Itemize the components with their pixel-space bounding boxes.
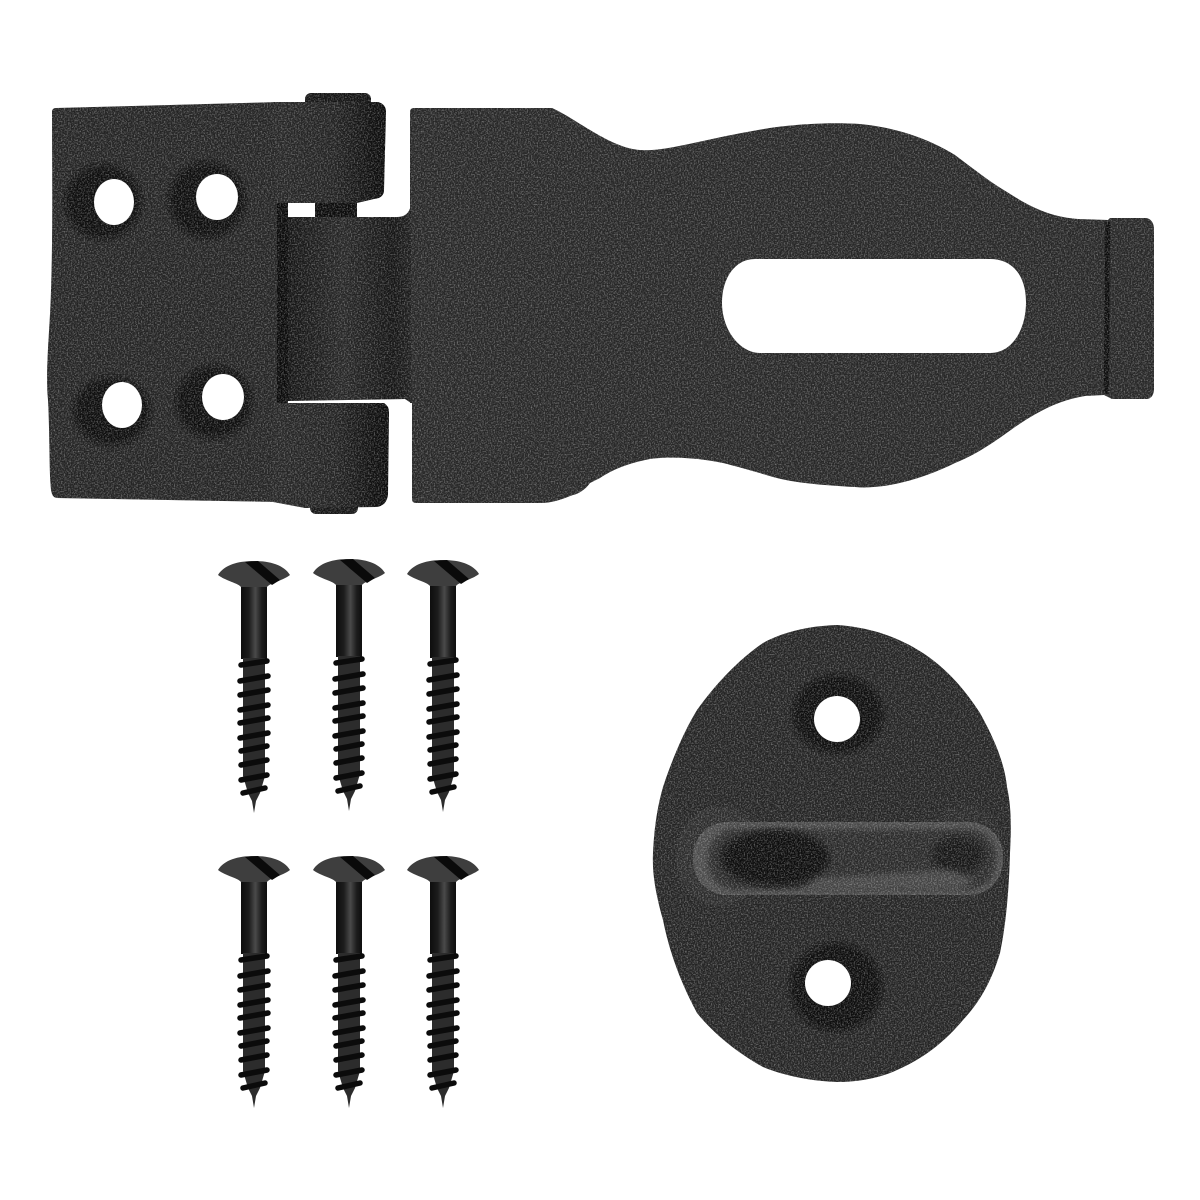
staple loop right shadow <box>932 837 984 873</box>
countersink: bottom left <box>74 377 150 445</box>
staple loop left shadow <box>721 830 829 886</box>
hinge gap opening <box>288 203 315 217</box>
staple loop lower highlight <box>800 870 975 892</box>
lower hinge knuckle <box>273 403 389 514</box>
hinge pin gap <box>315 203 357 219</box>
screws: bottom row <box>218 856 479 1108</box>
hasp assembly <box>47 93 1154 1082</box>
staple loop body <box>708 829 996 890</box>
bottom countersink <box>790 943 882 1031</box>
staple loop rim <box>693 822 1003 895</box>
staple left foot ring <box>676 806 764 906</box>
countersink: top right <box>169 162 245 238</box>
countersink: bottom right <box>176 366 252 438</box>
hinge leaf plate <box>47 102 280 502</box>
screws: top row <box>218 559 479 813</box>
central hinge barrel <box>288 203 411 403</box>
strap bent tip crease <box>1106 222 1108 394</box>
strap with padlock slot <box>410 108 1154 503</box>
barrel shadow strip <box>277 203 288 403</box>
staple right foot ring <box>927 804 1003 900</box>
countersink: top left <box>65 165 141 239</box>
staple screw holes <box>805 696 860 1006</box>
upper hinge knuckle <box>273 93 386 203</box>
top countersink <box>793 675 883 753</box>
staple plate <box>653 625 1011 1082</box>
hasp mounting holes <box>94 174 244 428</box>
